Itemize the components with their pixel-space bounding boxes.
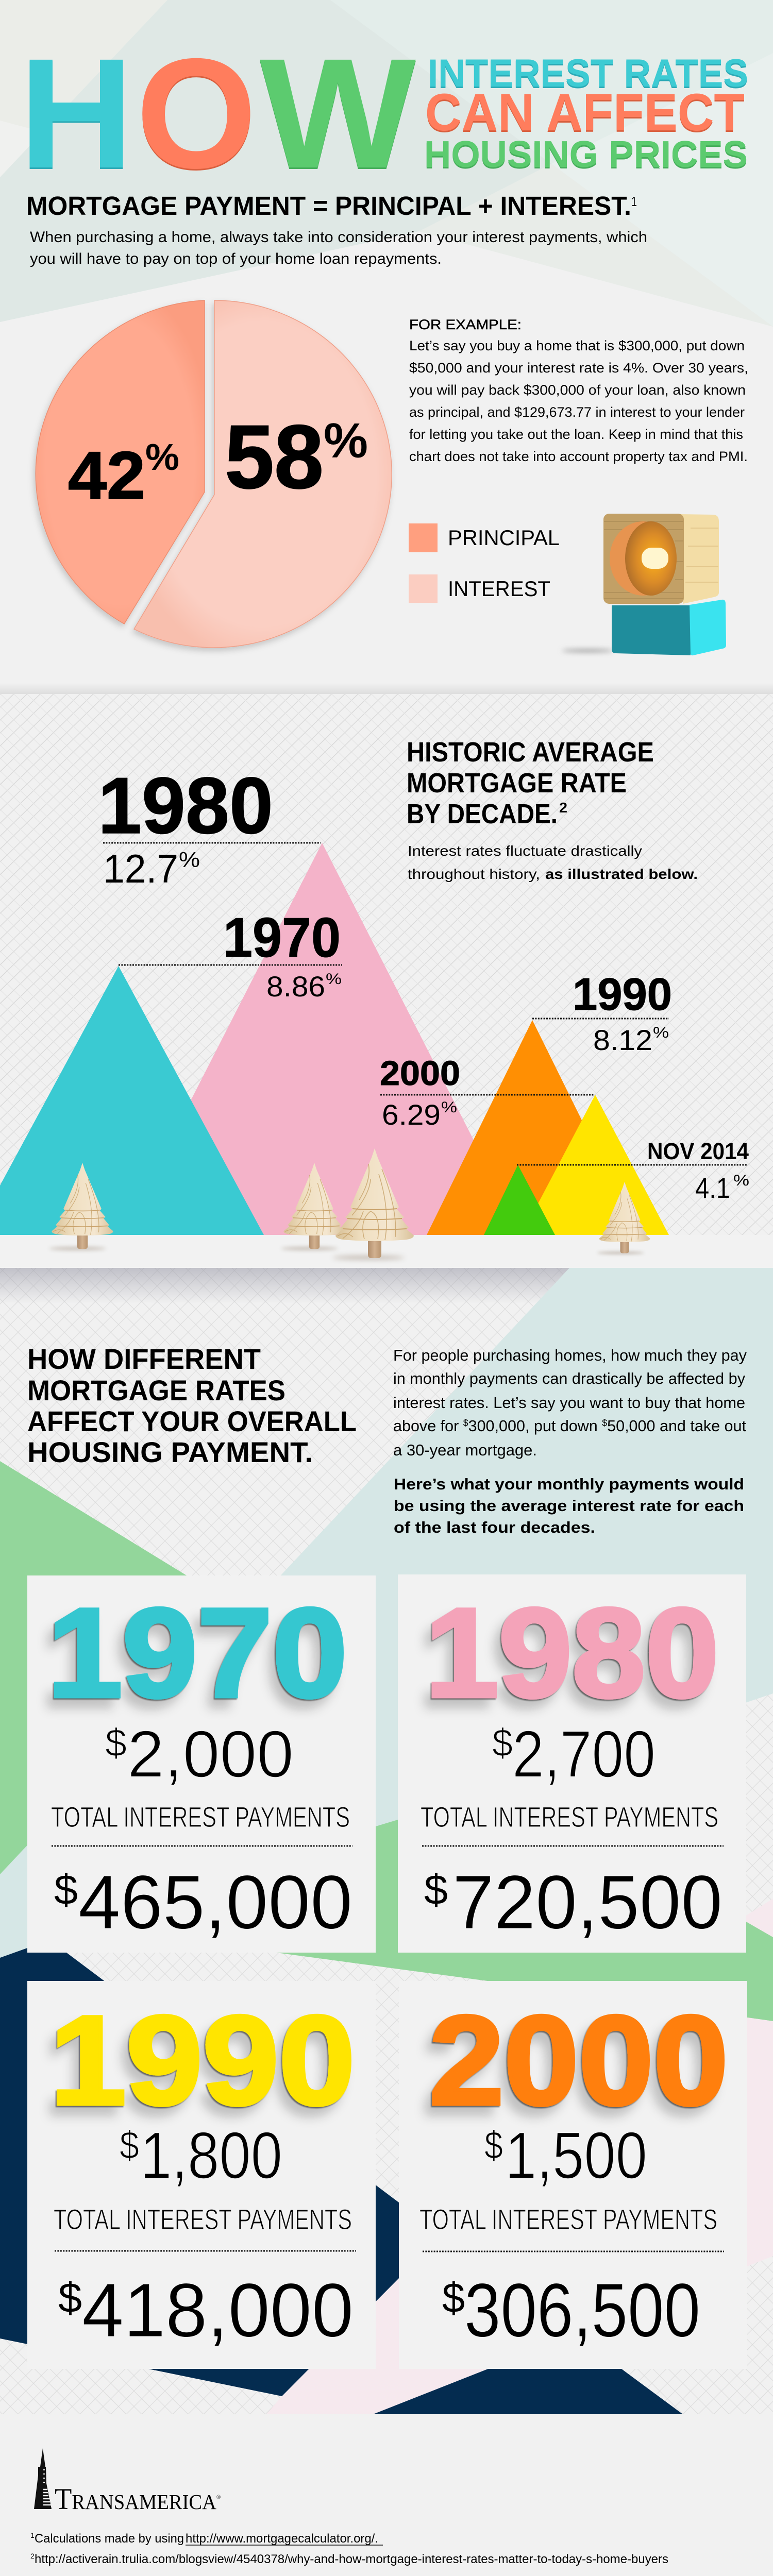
total interest: 465,000	[78, 1860, 352, 1945]
heading: how different mortgage rates	[27, 1343, 357, 1468]
footnotes: http://www.mortgagecalculator.org/.	[186, 2532, 378, 2546]
mountain chart: historic mortgage rates	[0, 843, 669, 1235]
label 42%	[68, 437, 179, 513]
label: 1970 rate	[119, 906, 342, 1003]
label: 2000 rate: 6.29	[382, 1098, 441, 1131]
mountain: 1980	[122, 843, 522, 1235]
intro text	[30, 229, 647, 267]
ground band	[0, 1235, 773, 1268]
monthly payment: $	[105, 1721, 127, 1765]
title: W	[260, 26, 417, 201]
text: rates fluctuate: as illustrated below.	[545, 866, 698, 882]
monthly payment: 1,500	[505, 2119, 647, 2193]
text: monthly payment explanation: above for	[393, 1417, 460, 1435]
text: monthly payment explanation: Here’s what your monthly payments would	[394, 1475, 744, 1493]
card: 1990	[27, 1981, 376, 2369]
example text: $50,000 and your interest rate is 4%. Over 30 years,	[409, 360, 748, 376]
text: monthly payment explanation: of the last four decades.	[394, 1518, 595, 1536]
footnotes: http://activerain.trulia.com/blogsview/4540378/why-and-how-mortgage-interest-rates-matter-to-today-s-home-buyers	[35, 2552, 668, 2566]
total interest: $	[424, 1867, 448, 1913]
label 58%: 58	[225, 407, 324, 507]
total interest: 306,500	[464, 2268, 700, 2353]
label: 2000 rate: %	[441, 1099, 457, 1116]
card: 1970: TOTAL INTEREST PAYMENTS	[51, 1801, 350, 1833]
label 42%: %	[145, 437, 179, 478]
label: Nov 2014 rate: 4.1	[695, 1172, 730, 1204]
mountain: Nov 2014	[484, 1165, 555, 1235]
title: O	[136, 26, 257, 201]
footnotes: 1	[30, 2531, 35, 2539]
monthly payment: 2,700	[512, 1717, 656, 1791]
title: O	[136, 28, 257, 202]
text: rates fluctuate: Interest rates fluctuate drastically	[408, 843, 642, 859]
card: 1990: TOTAL INTEREST PAYMENTS	[54, 2203, 352, 2235]
title: CAN AFFECT	[425, 83, 745, 142]
year 1990: 1990	[50, 1990, 355, 2131]
mountain: 2000	[522, 1095, 669, 1235]
text: monthly payment explanation: For people purchasing homes, how much they pay	[393, 1346, 747, 1364]
icon: wooden lamp blocks	[562, 514, 726, 655]
example text: you will pay back $300,000 of your loan, also known	[409, 382, 746, 398]
legend: INTEREST	[448, 577, 550, 601]
footnotes	[30, 2531, 668, 2566]
heading: historic average mortgage rate: MORTGAGE RATE	[407, 768, 627, 799]
label: 1980 rate: 1980	[98, 761, 273, 850]
legend	[409, 523, 560, 603]
footnotes: Calculations made by using	[35, 2532, 184, 2546]
heading: mortgage payment equation: 1	[631, 194, 637, 209]
text: monthly payment explanation: a 30-year mortgage.	[393, 1441, 537, 1459]
label 58%: %	[324, 413, 368, 468]
year 2000: 2000	[429, 1990, 728, 2131]
label: 1980 rate	[98, 761, 321, 891]
text: monthly payment explanation	[393, 1346, 747, 1536]
label: 1970 rate: 8.86	[266, 970, 325, 1003]
icon: wooden tree 2	[281, 1163, 345, 1250]
label: Nov 2014 rate: %	[733, 1172, 749, 1189]
monthly payment: 2,000	[127, 1717, 294, 1791]
shadow under ground band	[0, 1268, 773, 1304]
title: CAN AFFECT	[425, 84, 745, 143]
monthly payment: $	[492, 1721, 513, 1765]
example text	[409, 317, 748, 464]
label: 1970 rate: %	[326, 971, 342, 988]
label: 1980 rate: 12.7	[103, 846, 178, 891]
label: 1970 rate: 1970	[223, 906, 341, 969]
legend: PRINCIPAL	[448, 526, 560, 550]
heading: mortgage payment equation: MORTGAGE PAYMENT = PRINCIPAL + INTEREST.	[26, 191, 631, 221]
text: monthly payment explanation: interest rates. Let’s say you want to buy that home	[393, 1394, 745, 1412]
logo: Transamerica: TRANSAMERICA	[55, 2482, 216, 2516]
title: H	[19, 28, 133, 202]
title: INTEREST RATES	[428, 53, 748, 97]
title: HOUSING PRICES	[424, 135, 748, 177]
heading: how different mortgage rates: HOUSING PAYMENT.	[27, 1436, 313, 1468]
monthly payment: $	[120, 2124, 139, 2167]
heading: historic average mortgage rate: BY DECADE.	[407, 799, 558, 829]
heading: historic average mortgage rate: HISTORIC AVERAGE	[407, 737, 654, 768]
pie slice: interest 58%	[134, 300, 392, 648]
icon: wooden tree 3	[332, 1148, 414, 1260]
footnotes: 2	[30, 2552, 35, 2560]
label: 1990 rate: %	[653, 1024, 669, 1041]
card: 2000	[399, 1981, 747, 2369]
label: Nov 2014 rate	[517, 1138, 749, 1204]
text: monthly payment explanation: 300,000, put down	[468, 1417, 602, 1435]
example text: Let’s say you buy a home that is $300,000, put down	[409, 338, 745, 353]
heading: how different mortgage rates: MORTGAGE RATES	[27, 1374, 285, 1406]
intro text: When purchasing a home, always take into consideration your interest payments, which	[30, 229, 647, 246]
title: H	[19, 26, 133, 201]
icon: wooden tree 1	[49, 1163, 113, 1250]
icon: pyramid tower	[34, 2448, 52, 2509]
heading: how different mortgage rates: HOW DIFFERENT	[27, 1343, 261, 1375]
heading: how different mortgage rates: AFFECT YOUR OVERALL	[27, 1405, 357, 1437]
label: 1990 rate	[532, 969, 672, 1056]
text: monthly payment explanation: be using the average interest rate for each	[394, 1497, 744, 1515]
text: monthly payment explanation: $	[463, 1418, 468, 1428]
total interest: $	[58, 2275, 82, 2321]
heading: historic average mortgage rate: 2	[559, 800, 567, 816]
logo: Transamerica: ®	[216, 2494, 221, 2500]
monthly payment: $	[484, 2124, 503, 2167]
text: monthly payment explanation: $	[602, 1418, 607, 1428]
pie chart: principal vs interest	[36, 300, 392, 648]
card: 1970	[27, 1575, 376, 1953]
background: patterned lower panel	[0, 694, 773, 2414]
year 1980: 1980	[425, 1582, 719, 1724]
mountain: 1970	[0, 966, 264, 1235]
year 1970: 1970	[47, 1582, 347, 1724]
total interest: 418,000	[82, 2268, 354, 2353]
mountain: 1990	[427, 1020, 638, 1235]
monthly payment: 1,800	[140, 2119, 282, 2193]
example text: as principal, and $129,673.77 in interest to your lender	[409, 404, 745, 420]
total interest: $	[54, 1867, 78, 1913]
example text: FOR EXAMPLE:	[409, 317, 522, 332]
background: top geometric panel	[0, 0, 773, 694]
title: HOUSING PRICES	[424, 134, 748, 175]
label: Nov 2014 rate: NOV 2014	[647, 1138, 749, 1164]
text: monthly payment explanation: 50,000 and take out	[607, 1417, 746, 1435]
example text: for letting you take out the loan. Keep in mind that this	[409, 427, 743, 442]
title: INTEREST RATES	[428, 52, 748, 95]
title: W	[260, 28, 417, 202]
intro text: you will have to pay on top of your home loan repayments.	[30, 250, 442, 267]
label: 2000 rate: 2000	[380, 1054, 460, 1093]
label: 1990 rate: 1990	[573, 969, 672, 1020]
text: monthly payment explanation: in monthly payments can drastically be affected by	[393, 1369, 745, 1387]
total interest: $	[442, 2275, 465, 2321]
logo: Transamerica	[34, 2448, 221, 2516]
text: rates fluctuate	[408, 843, 698, 882]
label: 1990 rate: 8.12	[593, 1024, 652, 1056]
label 42%: 42	[68, 437, 145, 513]
pie slice: principal 42%	[36, 300, 205, 624]
background: colored geometric shapes	[0, 1268, 773, 2414]
example text: chart does not take into account property tax and PMI.	[409, 449, 748, 464]
total interest: 720,500	[452, 1860, 722, 1945]
label: 2000 rate	[380, 1054, 594, 1131]
title	[19, 26, 748, 202]
heading: historic average mortgage rate	[407, 737, 654, 829]
card: 1980	[398, 1574, 746, 1953]
text: rates fluctuate: throughout history,	[408, 866, 540, 882]
icon: wooden tree 4	[597, 1182, 650, 1254]
label: 1980 rate: %	[179, 848, 200, 872]
